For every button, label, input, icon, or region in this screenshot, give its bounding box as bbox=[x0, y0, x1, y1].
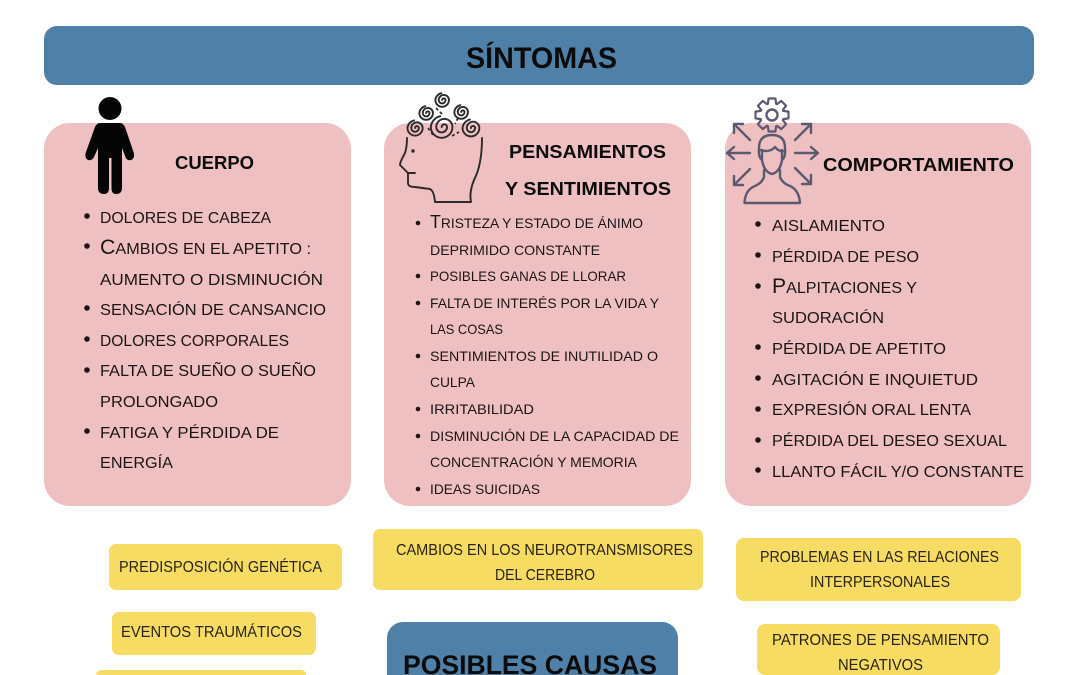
list: cuerpo symptoms: SENSACIÓN DE CANSANCIO bbox=[100, 300, 326, 319]
title banner: síntomas bbox=[44, 26, 1034, 85]
icon: person bbox=[85, 97, 134, 194]
list: pensamientos symptoms: DISMINUCIÓN DE LA CAPACIDAD DE bbox=[430, 428, 679, 444]
list: pensamientos symptoms: CONCENTRACIÓN Y MEMORIA bbox=[430, 454, 638, 470]
icon: head with spirals bbox=[400, 93, 482, 202]
cause: problemas en las relaciones: INTERPERSONALES bbox=[810, 574, 950, 591]
panel: cuerpo bbox=[44, 97, 351, 506]
cause: patrones de pensamiento bbox=[757, 624, 1000, 675]
heading: pensamientos y sentimientos bbox=[505, 142, 671, 199]
cause: eventos traumáticos: EVENTOS TRAUMÁTICOS bbox=[121, 622, 302, 641]
cause: cambios en los neurotransmisores: CAMBIOS EN LOS NEUROTRANSMISORES bbox=[396, 542, 693, 559]
list: cuerpo symptoms: DOLORES DE CABEZA bbox=[100, 210, 271, 227]
list: cuerpo symptoms: AUMENTO O DISMINUCIÓN bbox=[100, 270, 323, 289]
list: pensamientos symptoms: FALTA DE INTERÉS POR LA VIDA Y bbox=[430, 295, 660, 311]
cause: cambios en los neurotransmisores: DEL CEREBRO bbox=[495, 567, 595, 584]
banner: posibles causas bbox=[387, 622, 678, 675]
cause: problemas en las relaciones: PROBLEMAS EN LAS RELACIONES bbox=[760, 549, 999, 566]
list: comportamiento symptoms: PÉRDIDA DE PESO bbox=[772, 247, 919, 266]
heading: pensamientos y sentimientos: PENSAMIENTOS bbox=[509, 142, 666, 162]
list: pensamientos symptoms: TRISTEZA Y ESTADO DE ÁNIMO bbox=[430, 212, 643, 232]
heading: cuerpo: CUERPO bbox=[175, 153, 254, 173]
cause: problemas en las relaciones bbox=[736, 538, 1021, 601]
list: comportamiento symptoms: AGITACIÓN E INQUIETUD bbox=[772, 370, 978, 389]
list: pensamientos symptoms: SENTIMIENTOS DE INUTILIDAD O bbox=[430, 348, 658, 364]
list: comportamiento symptoms: SUDORACIÓN bbox=[772, 308, 884, 327]
icon: person with gear and arrows bbox=[727, 98, 818, 203]
cause: eventos traumáticos bbox=[112, 612, 316, 655]
cause: patrones de pensamiento: PATRONES DE PENSAMIENTO bbox=[772, 632, 989, 649]
list: cuerpo symptoms: FALTA DE SUEÑO O SUEÑO bbox=[100, 360, 316, 380]
panel: pensamientos y sentimientos bbox=[384, 93, 691, 506]
list: pensamientos symptoms: DEPRIMIDO CONSTANTE bbox=[430, 242, 600, 258]
list: cuerpo symptoms bbox=[84, 210, 326, 472]
list: comportamiento symptoms: LLANTO FÁCIL Y/O CONSTANTE bbox=[772, 462, 1024, 481]
panel: comportamiento bbox=[725, 98, 1031, 506]
list: cuerpo symptoms: DOLORES CORPORALES bbox=[100, 333, 289, 350]
list: comportamiento symptoms: AISLAMIENTO bbox=[772, 218, 885, 235]
cause: predisposición genética: PREDISPOSICIÓN GENÉTICA bbox=[119, 557, 322, 576]
cause: patrones de pensamiento: NEGATIVOS bbox=[838, 657, 923, 674]
heading: comportamiento: COMPORTAMIENTO bbox=[823, 155, 1014, 175]
title banner: síntomas: SÍNTOMAS bbox=[466, 41, 617, 75]
list: comportamiento symptoms: PÉRDIDA DE APETITO bbox=[772, 339, 946, 358]
heading: pensamientos y sentimientos: Y SENTIMIENTOS bbox=[505, 179, 671, 199]
list: comportamiento symptoms: PALPITACIONES Y bbox=[772, 275, 917, 298]
cause: cropped box bbox=[96, 670, 306, 675]
cause: cambios en los neurotransmisores bbox=[373, 529, 703, 590]
list: comportamiento symptoms: PÉRDIDA DEL DESEO SEXUAL bbox=[772, 431, 1007, 450]
list: pensamientos symptoms: LAS COSAS bbox=[430, 321, 503, 337]
list: pensamientos symptoms: CULPA bbox=[430, 374, 476, 390]
list: comportamiento symptoms: EXPRESIÓN ORAL LENTA bbox=[772, 400, 971, 419]
cause: predisposición genética bbox=[109, 544, 342, 590]
list: pensamientos symptoms: POSIBLES GANAS DE LLORAR bbox=[430, 268, 626, 284]
list: cuerpo symptoms: PROLONGADO bbox=[100, 394, 218, 411]
list: pensamientos symptoms: IDEAS SUICIDAS bbox=[430, 481, 540, 497]
list: cuerpo symptoms: FATIGA Y PÉRDIDA DE bbox=[100, 423, 279, 442]
list: cuerpo symptoms: ENERGÍA bbox=[100, 453, 173, 472]
list: pensamientos symptoms bbox=[416, 212, 679, 497]
list: comportamiento symptoms bbox=[755, 218, 1024, 481]
list: cuerpo symptoms: CAMBIOS EN EL APETITO : bbox=[100, 236, 311, 259]
list: pensamientos symptoms: IRRITABILIDAD bbox=[430, 401, 534, 417]
